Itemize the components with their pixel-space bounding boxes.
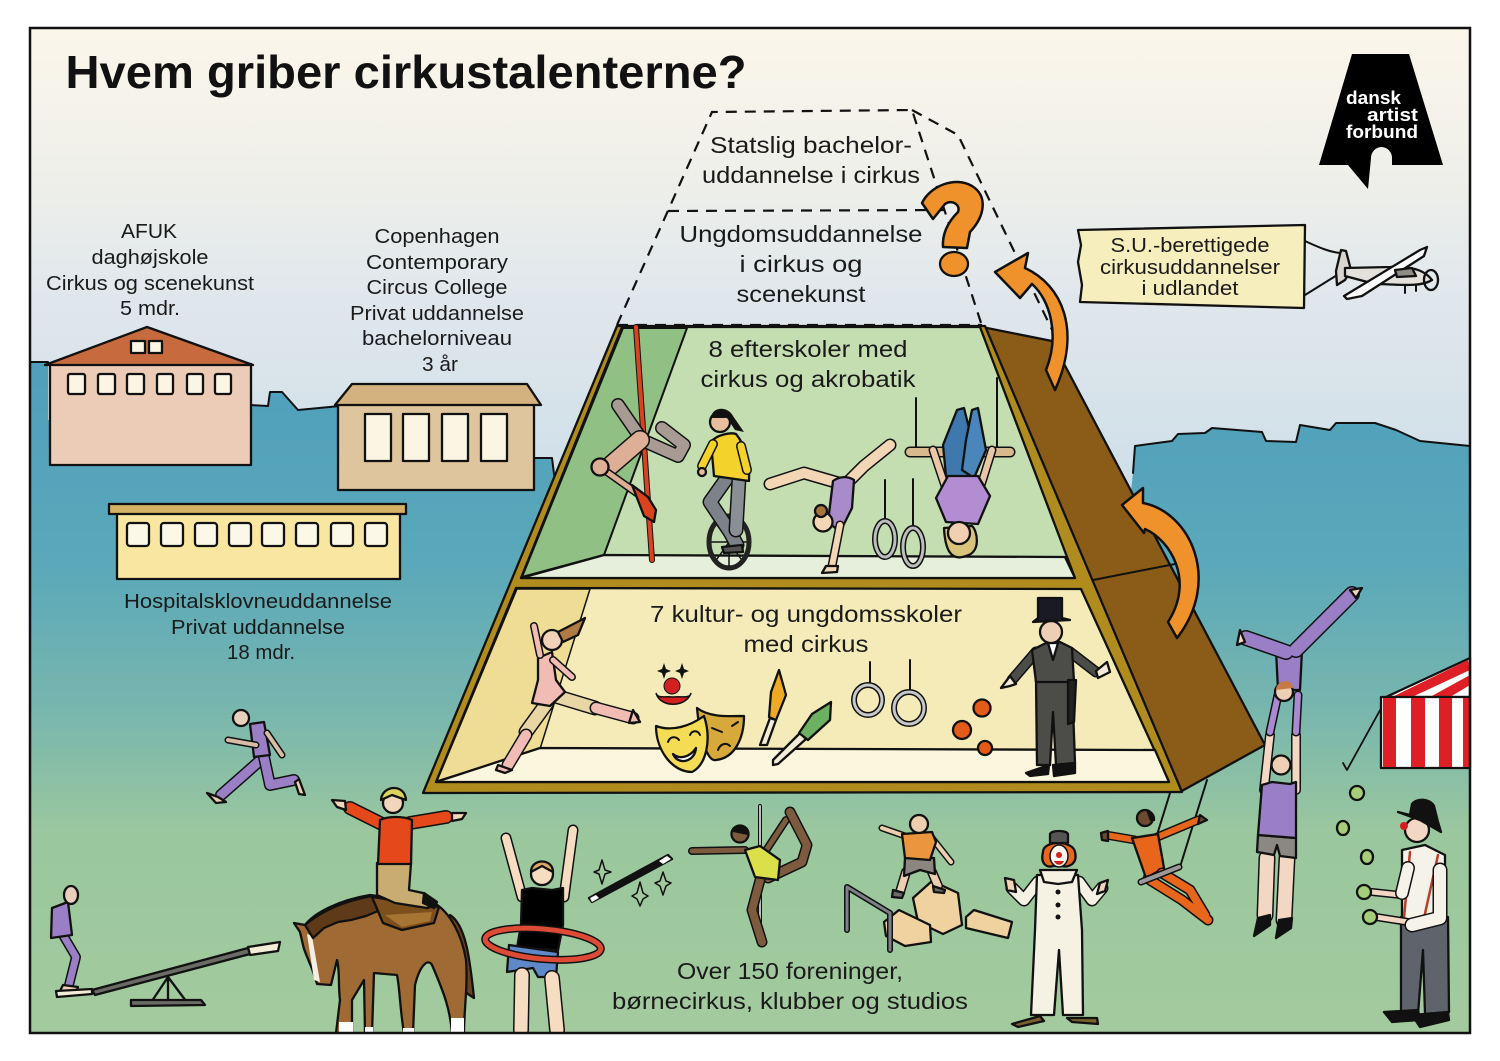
- label: 8 efterskoler: [700, 336, 916, 392]
- lower room left wall: [437, 589, 590, 781]
- building: Hospitalsklovneuddannelse: [109, 504, 406, 579]
- icon: theatre masks: [656, 708, 744, 772]
- label: foreninger: børnecirkus, klubber og studios: [612, 988, 968, 1014]
- pyramid side wall: [982, 327, 1265, 792]
- label: Copenhagen Contemporary Circus College: Privat uddannelse: [350, 303, 524, 325]
- icon: hanging rings upper: [875, 479, 923, 566]
- label: Hospitalsklovneuddannelse: 18 mdr.: [227, 642, 295, 664]
- icon: hanging rings lower: [854, 660, 924, 724]
- banner with plane: i udlandet: [1142, 278, 1239, 300]
- figure: boy on box with boxes: [847, 815, 1012, 950]
- label: AFUK: Cirkus og scenekunst: [46, 273, 254, 295]
- figure: handstand gymnast: [770, 445, 890, 573]
- figure: trapeze hanger: [910, 378, 1010, 557]
- pyramid frame and rooms: [423, 326, 1182, 793]
- background sea and city skyline: [30, 362, 1470, 1033]
- figure: pole dancer: [692, 806, 807, 945]
- upper room wall: [521, 327, 1075, 578]
- banner tow lines: [1305, 241, 1342, 295]
- figure: trapeze woman: [1101, 780, 1208, 920]
- label: Copenhagen Contemporary Circus College: [350, 226, 524, 376]
- figure: seesaw person: [51, 886, 78, 992]
- plane: [1336, 247, 1438, 299]
- label: 7 kultur- og ungdomsskoler: med cirkus: [744, 631, 868, 657]
- label: AFUK: AFUK: [121, 221, 178, 243]
- juggling balls: [1337, 786, 1373, 864]
- banner with plane: cirkusuddannelser: [1100, 257, 1280, 279]
- icon: seesaw: [56, 942, 280, 1006]
- logo: dansk artist forbund: dansk: [1346, 88, 1402, 108]
- label: Statslig bachelor: [702, 132, 920, 188]
- figure: runner: [207, 710, 305, 803]
- pyramid dashed upper levels: [617, 110, 1056, 338]
- label: Hospitalsklovneuddannelse: Privat uddannelse: [171, 617, 345, 639]
- figure: boy with hula hoop: [484, 830, 602, 1030]
- label: Ungdomsuddannelse: Ungdomsuddannelse: [680, 221, 922, 247]
- label: Statslig bachelor: uddannelse i cirkus: [702, 162, 920, 188]
- upper room floor: [521, 555, 1075, 578]
- icon: clown face: [656, 663, 691, 704]
- banner: [1078, 225, 1305, 308]
- label: Statslig bachelor: Statslig bachelor-: [710, 132, 912, 158]
- logo: dansk artist forbund: [1319, 54, 1443, 189]
- label: 8 efterskoler: 8 efterskoler med: [708, 336, 908, 362]
- label: Copenhagen Contemporary Circus College: Contemporary: [366, 252, 508, 274]
- label: AFUK: 5 mdr.: [120, 298, 180, 320]
- label: Copenhagen Contemporary Circus College: Circus College: [366, 277, 508, 299]
- label: Ungdomsuddannelse: [680, 221, 922, 307]
- label: 8 efterskoler: cirkus og akrobatik: [700, 366, 916, 392]
- figure: dancer: [496, 618, 640, 773]
- banner with plane: [1078, 225, 1438, 308]
- title: Hvem griber cirkustalenterne?: [66, 46, 746, 98]
- icon: magic wand: [589, 855, 672, 906]
- question mark: [922, 182, 983, 276]
- icon: circus tent: [1343, 658, 1470, 770]
- arrow: upper: [995, 253, 1067, 390]
- figure: acrobat base: [1254, 735, 1296, 938]
- icon: juggling balls: [953, 700, 992, 755]
- label: Ungdomsuddannelse: i cirkus og: [740, 251, 862, 277]
- label: 7 kultur- og ungdomsskoler: [650, 601, 962, 657]
- skyline outline: [30, 362, 1470, 490]
- logo: dansk artist forbund: forbund: [1346, 122, 1418, 142]
- label: AFUK: [46, 221, 254, 320]
- label: Ungdomsuddannelse: scenekunst: [736, 281, 866, 307]
- label: Copenhagen Contemporary Circus College: Copenhagen: [374, 226, 500, 248]
- building: Copenhagen Contemporary Circus College: [335, 384, 541, 490]
- building: AFUK: [45, 327, 253, 465]
- label: foreninger: [612, 958, 968, 1014]
- upper room left wall: [522, 328, 687, 577]
- figure: unicyclist: [698, 409, 749, 568]
- label: Copenhagen Contemporary Circus College: 3 år: [422, 354, 458, 376]
- label: Hospitalsklovneuddannelse: Hospitalsklovneuddannelse: [124, 591, 392, 613]
- label: foreninger: Over 150 foreninger,: [677, 958, 903, 984]
- label: 7 kultur- og ungdomsskoler: 7 kultur- og ungdomsskoler: [650, 601, 962, 627]
- arrow: lower: [1122, 488, 1199, 638]
- logo: dansk artist forbund: artist: [1367, 105, 1418, 125]
- figure: ringmaster: [1001, 598, 1110, 776]
- figure: aerialist on silk: [592, 327, 684, 560]
- figure: juggler: [1337, 786, 1449, 1027]
- figure: rider: [332, 788, 466, 908]
- lower room floor: [436, 748, 1169, 782]
- lower room wall: [436, 588, 1169, 782]
- figure: horse: [294, 895, 474, 1033]
- boxes: [913, 881, 962, 934]
- icon: juggling clubs: [760, 670, 831, 765]
- banner with plane: S.U.-berettigede: [1110, 235, 1270, 257]
- white margin below frame: [0, 1034, 1500, 1061]
- rail: [847, 887, 890, 950]
- figure: white clown: [1005, 831, 1108, 1027]
- label: AFUK: daghøjskole: [92, 247, 208, 269]
- label: Hospitalsklovneuddannelse: [124, 591, 392, 664]
- label: Copenhagen Contemporary Circus College: bachelorniveau: [362, 328, 512, 350]
- figure: acrobat handstand: [1237, 588, 1362, 732]
